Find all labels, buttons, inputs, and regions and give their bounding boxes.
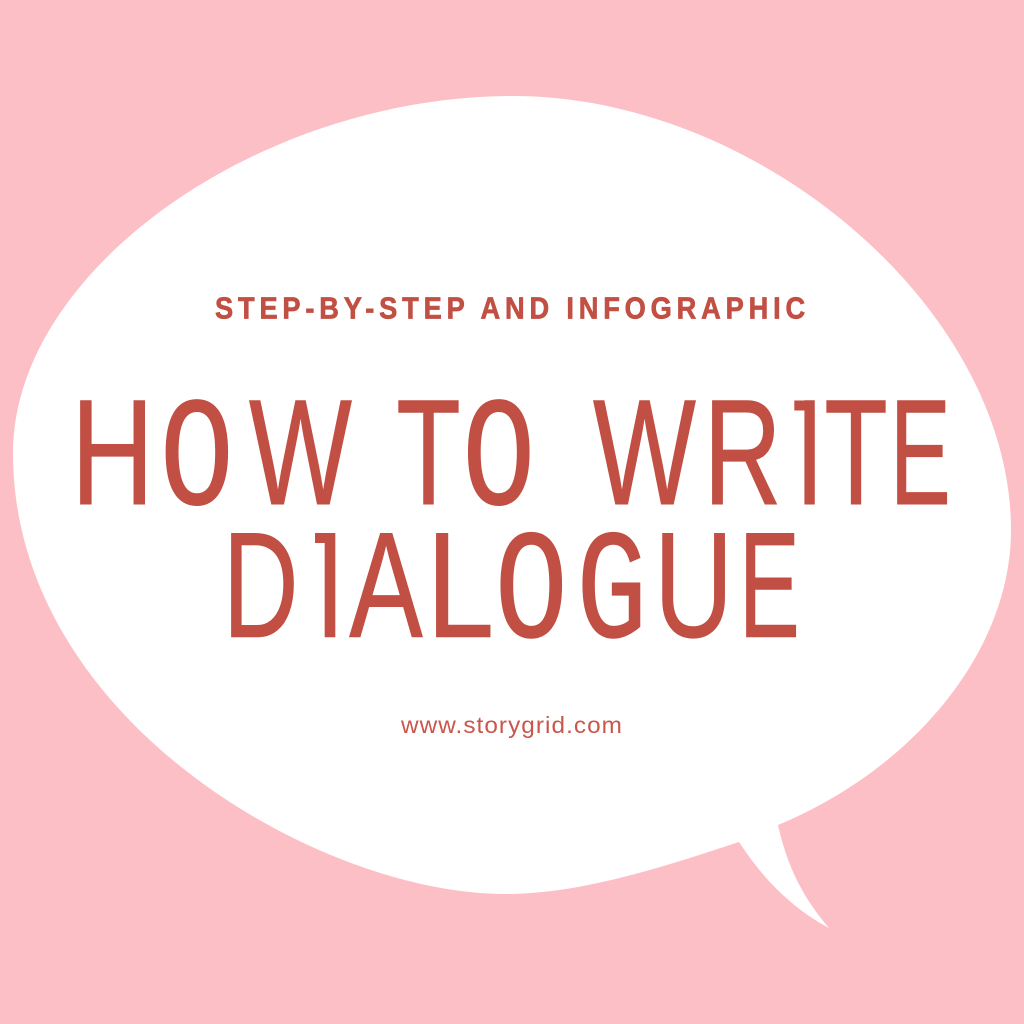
title line 1: W <box>249 368 352 536</box>
title line 1: W <box>593 368 696 536</box>
title line 1: H <box>71 368 154 536</box>
title line 2: O <box>495 507 568 684</box>
title line 1: O <box>462 374 535 551</box>
title line 1: O <box>160 374 234 551</box>
speech bubble <box>13 96 1011 928</box>
title line 2: D <box>223 501 298 669</box>
title line 2: E <box>739 501 800 669</box>
subtitle: STEP-BY-STEP AND INFOGRAPHIC <box>215 290 810 326</box>
flag on letter I, line 2 <box>315 533 326 543</box>
title line 2: U <box>654 501 733 669</box>
title line 2: A <box>349 501 423 669</box>
title line 1: T <box>824 368 888 536</box>
title <box>71 368 951 684</box>
title line 2: G <box>576 507 647 684</box>
website url: www.storygrid.com <box>400 712 623 738</box>
title line 1: I <box>795 368 824 536</box>
title line 1: R <box>704 368 782 536</box>
flag on letter I, line 1 <box>794 400 805 410</box>
title line 2: I <box>315 501 345 669</box>
title line 2: L <box>426 501 494 669</box>
title line 1: E <box>890 368 951 536</box>
title line 1: T <box>396 368 461 536</box>
